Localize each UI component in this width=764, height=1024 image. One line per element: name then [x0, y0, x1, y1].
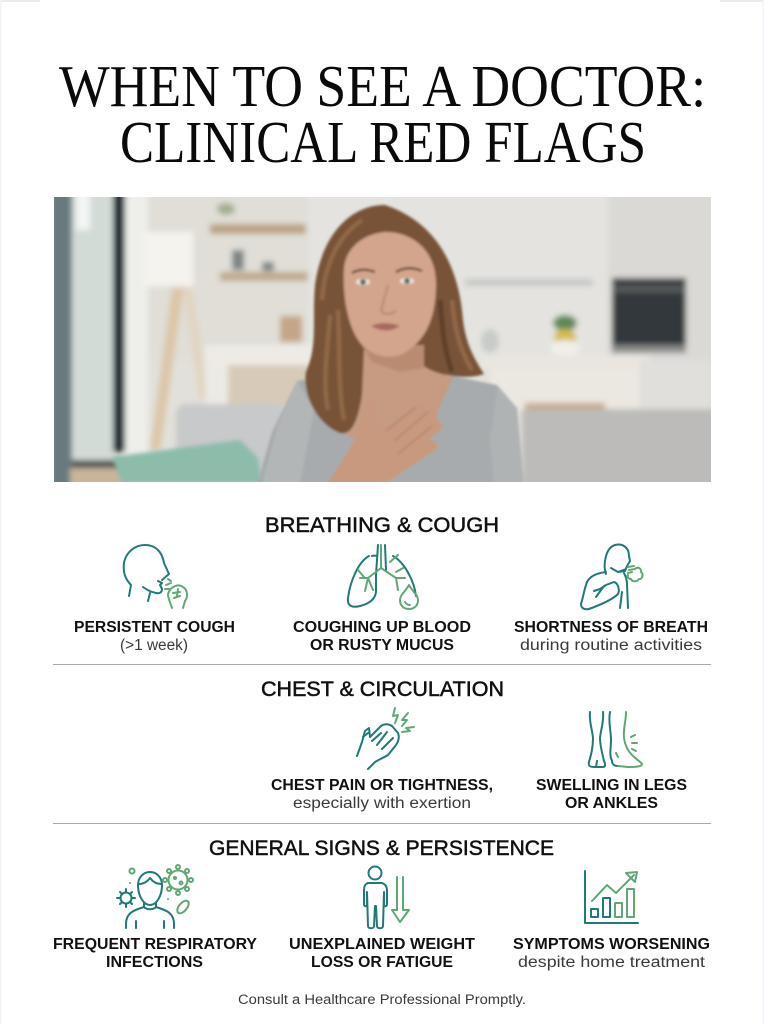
shirt: [258, 375, 506, 482]
item: coughing up blood: [293, 619, 471, 654]
item: swelling: SWELLING IN LEGS: [536, 777, 687, 794]
neck shadow: [362, 345, 424, 372]
item: persistent cough: PERSISTENT COUGH: [74, 619, 235, 636]
item: chest pain: CHEST PAIN OR TIGHTNESS,: [271, 777, 493, 794]
title: [59, 53, 706, 175]
section heading: chest and circulation: CHEST & CIRCULATION: [261, 678, 504, 701]
item: persistent cough: (>1 week): [120, 637, 188, 654]
item: symptoms worsening: SYMPTOMS WORSENING: [513, 936, 710, 953]
item: coughing up blood: COUGHING UP BLOOD: [293, 619, 471, 636]
item: weight loss: LOSS OR FATIGUE: [311, 954, 453, 971]
section heading: breathing and cough: BREATHING & COUGH: [265, 514, 499, 537]
icon: hand on chest with pain bolts: [357, 708, 414, 769]
icon: person short of breath: [581, 544, 642, 609]
icon: coughing head: [124, 545, 187, 608]
item: persistent cough: [74, 619, 235, 654]
footer note: Consult a Healthcare Professional Promptly.: [238, 992, 526, 1007]
title: WHEN TO SEE A DOCTOR:: [59, 53, 706, 119]
item: symptoms worsening: [513, 936, 710, 971]
item: frequent infections: FREQUENT RESPIRATORY: [53, 936, 258, 953]
item: symptoms worsening: despite home treatment: [518, 954, 706, 971]
item: swelling: OR ANKLES: [565, 795, 658, 812]
item: chest pain: especially with exertion: [293, 795, 471, 812]
face: [344, 232, 436, 357]
item: shortness of breath: SHORTNESS OF BREATH: [514, 619, 708, 636]
back hair: [305, 205, 484, 433]
item: frequent infections: [53, 936, 258, 971]
icon: person with viruses: [117, 865, 193, 928]
icon: person and downward weight arrow: [364, 866, 409, 928]
section heading: general signs: GENERAL SIGNS & PERSISTENCE: [209, 837, 554, 860]
icon: swollen legs: [589, 712, 642, 767]
item: frequent infections: INFECTIONS: [106, 954, 203, 971]
item: shortness of breath: during routine activities: [520, 637, 702, 654]
icon: rising chart: [585, 871, 638, 923]
item: weight loss: UNEXPLAINED WEIGHT: [289, 936, 476, 953]
item: coughing up blood: OR RUSTY MUCUS: [310, 637, 454, 654]
item: chest pain: [271, 777, 493, 812]
item: swelling: [536, 777, 687, 812]
icon: lungs with drop: [348, 545, 418, 609]
title: CLINICAL RED FLAGS: [120, 109, 646, 175]
item: shortness of breath: [514, 619, 708, 654]
chest skin: [345, 349, 454, 440]
item: weight loss: [289, 936, 476, 971]
photo: woman with hand on chest in a living room: [50, 190, 718, 490]
hand: [400, 412, 443, 473]
